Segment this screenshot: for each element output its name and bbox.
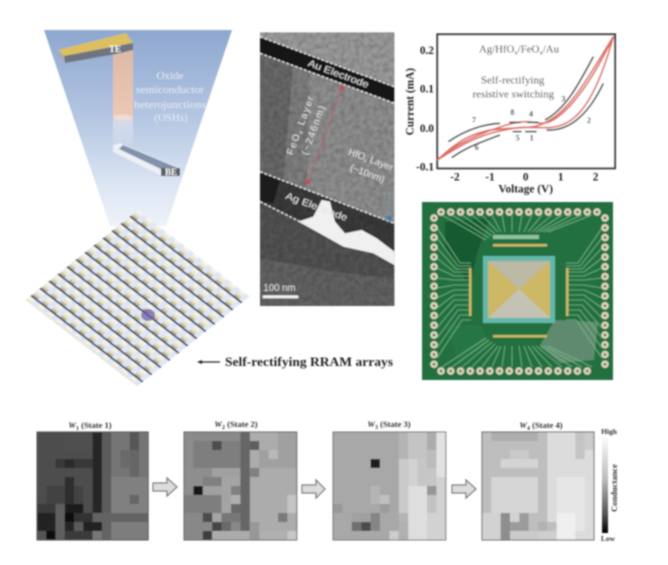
panel: TEM cross-section image: (~246nm) xyxy=(300,104,328,157)
connector strips xyxy=(469,235,568,338)
heatmap: W3 state 3 xyxy=(333,419,446,540)
heatmap: W2 state 2: (State 2) xyxy=(225,419,258,429)
chart annotations: resistive switching xyxy=(472,89,554,100)
oxide column xyxy=(113,45,133,144)
panel: I-V curve chart: Current (mA) xyxy=(404,68,416,135)
chart annotations: x xyxy=(539,49,544,56)
chart annotations: Self-rectifying xyxy=(481,76,544,87)
heatmap: W1 state 1: (State 1) xyxy=(79,420,112,430)
heatmap: W4 state 4: 4 xyxy=(527,426,530,432)
panel: RRAM crossbar array xyxy=(25,210,250,386)
heatmap: W4 state 4: W xyxy=(519,420,528,430)
label: oxide semiconductor heterojunctions: (OSHs) xyxy=(154,112,188,124)
chart annotations: 4 xyxy=(529,109,533,118)
panel: TEM cross-section image: x xyxy=(298,130,305,135)
top electrode TE: TE xyxy=(109,44,121,54)
chart annotations: 8 xyxy=(510,108,514,117)
panel: TEM cross-section image: Ag Electrode xyxy=(284,191,349,224)
label: oxide semiconductor heterojunctions: semiconductor xyxy=(136,84,204,96)
heatmap: W2 state 2: 2 xyxy=(222,425,225,431)
bottom electrode BE xyxy=(113,143,180,177)
label: Self-rectifying RRAM arrays: Self-rectifying RRAM arrays xyxy=(225,354,393,369)
chart annotations: /Au xyxy=(543,44,559,55)
circuit traces xyxy=(437,215,602,367)
axis tick labels: 0.1 xyxy=(420,84,434,96)
panel: I-V curve chart: -2 xyxy=(450,171,460,183)
heatmap: W3 state 3: (State 3) xyxy=(378,419,411,429)
chart annotations: 7 xyxy=(472,115,476,124)
panel: I-V curve chart: 0 xyxy=(523,171,529,183)
chart annotations: 2 xyxy=(587,116,591,125)
bottom electrode BE: BE xyxy=(165,167,177,177)
panel: I-V curve chart xyxy=(404,34,615,195)
panel: device schematic cone xyxy=(44,30,232,226)
colour bar: conductance scale: High xyxy=(601,427,618,436)
panel: TEM cross-section image: FeO xyxy=(285,133,303,157)
panel: TEM cross-section image: Layer xyxy=(366,154,395,174)
bond pad rows xyxy=(434,212,605,371)
chart annotations: Ag/HfO xyxy=(479,44,513,55)
panel: I-V curve chart: Voltage (V) xyxy=(498,183,553,195)
chart annotations: /FeO xyxy=(518,44,540,55)
heatmap: W4 state 4 xyxy=(482,420,594,540)
label: oxide semiconductor heterojunctions xyxy=(134,70,206,124)
arrow to array label xyxy=(197,360,220,364)
colour bar: conductance scale xyxy=(601,427,619,543)
panel: TEM cross-section image: x xyxy=(362,158,367,165)
chart annotations: x xyxy=(514,49,518,56)
black fit curves xyxy=(448,57,603,158)
panel: I-V curve chart: 2 xyxy=(593,171,599,183)
colour bar: conductance scale: Low xyxy=(601,534,616,543)
axis tick labels: 0.0 xyxy=(420,123,434,135)
axis tick labels: 0.2 xyxy=(420,45,434,57)
panel: TEM cross-section image: Au Electrode xyxy=(306,58,370,91)
panel: TEM cross-section image: 100 nm xyxy=(263,283,296,294)
arrow: state 3 to state 4 xyxy=(452,480,476,498)
heatmap: W1 state 1 xyxy=(37,420,148,540)
axis tick labels xyxy=(416,45,434,174)
panel: I-V curve chart: 1 xyxy=(558,171,564,183)
chart annotations: 5 xyxy=(516,134,520,143)
heatmap: W3 state 3: W xyxy=(367,419,376,429)
panel: TEM cross-section image: HfO xyxy=(347,147,367,163)
axis tick labels: -0.1 xyxy=(416,162,434,174)
chart annotations: 6 xyxy=(475,143,479,152)
arrow: state 2 to state 3 xyxy=(302,480,325,498)
chart annotations xyxy=(472,44,591,152)
label: oxide semiconductor heterojunctions: heterojunctions xyxy=(134,99,206,111)
panel: I-V curve chart: -1 xyxy=(485,171,495,183)
chart annotations: 1 xyxy=(530,134,534,143)
colour bar: conductance scale: Conductance xyxy=(609,464,619,512)
heatmap: W4 state 4: (State 4) xyxy=(530,420,563,430)
heatmap: W1 state 1: W xyxy=(68,420,77,430)
heatmap: W2 state 2 xyxy=(184,419,297,540)
label: oxide semiconductor heterojunctions: Oxide xyxy=(157,70,184,82)
panel: packaged chip photo xyxy=(422,202,613,380)
heatmap: W3 state 3: 3 xyxy=(375,425,378,431)
panel: TEM cross-section image xyxy=(260,32,395,306)
heatmap: W2 state 2: W xyxy=(214,419,223,429)
panel: TEM cross-section image: Layer xyxy=(295,94,317,131)
panel: TEM cross-section image: (~10nm) xyxy=(348,162,386,185)
chart annotations: 3 xyxy=(561,94,565,103)
chip carrier xyxy=(483,256,555,323)
heatmap: W1 state 1: 1 xyxy=(76,426,79,432)
chip die xyxy=(488,261,550,318)
red measured curves xyxy=(437,37,613,160)
top electrode TE xyxy=(58,33,133,63)
arrow: state 1 to state 2 xyxy=(153,478,177,496)
highlighted cell xyxy=(141,309,155,321)
